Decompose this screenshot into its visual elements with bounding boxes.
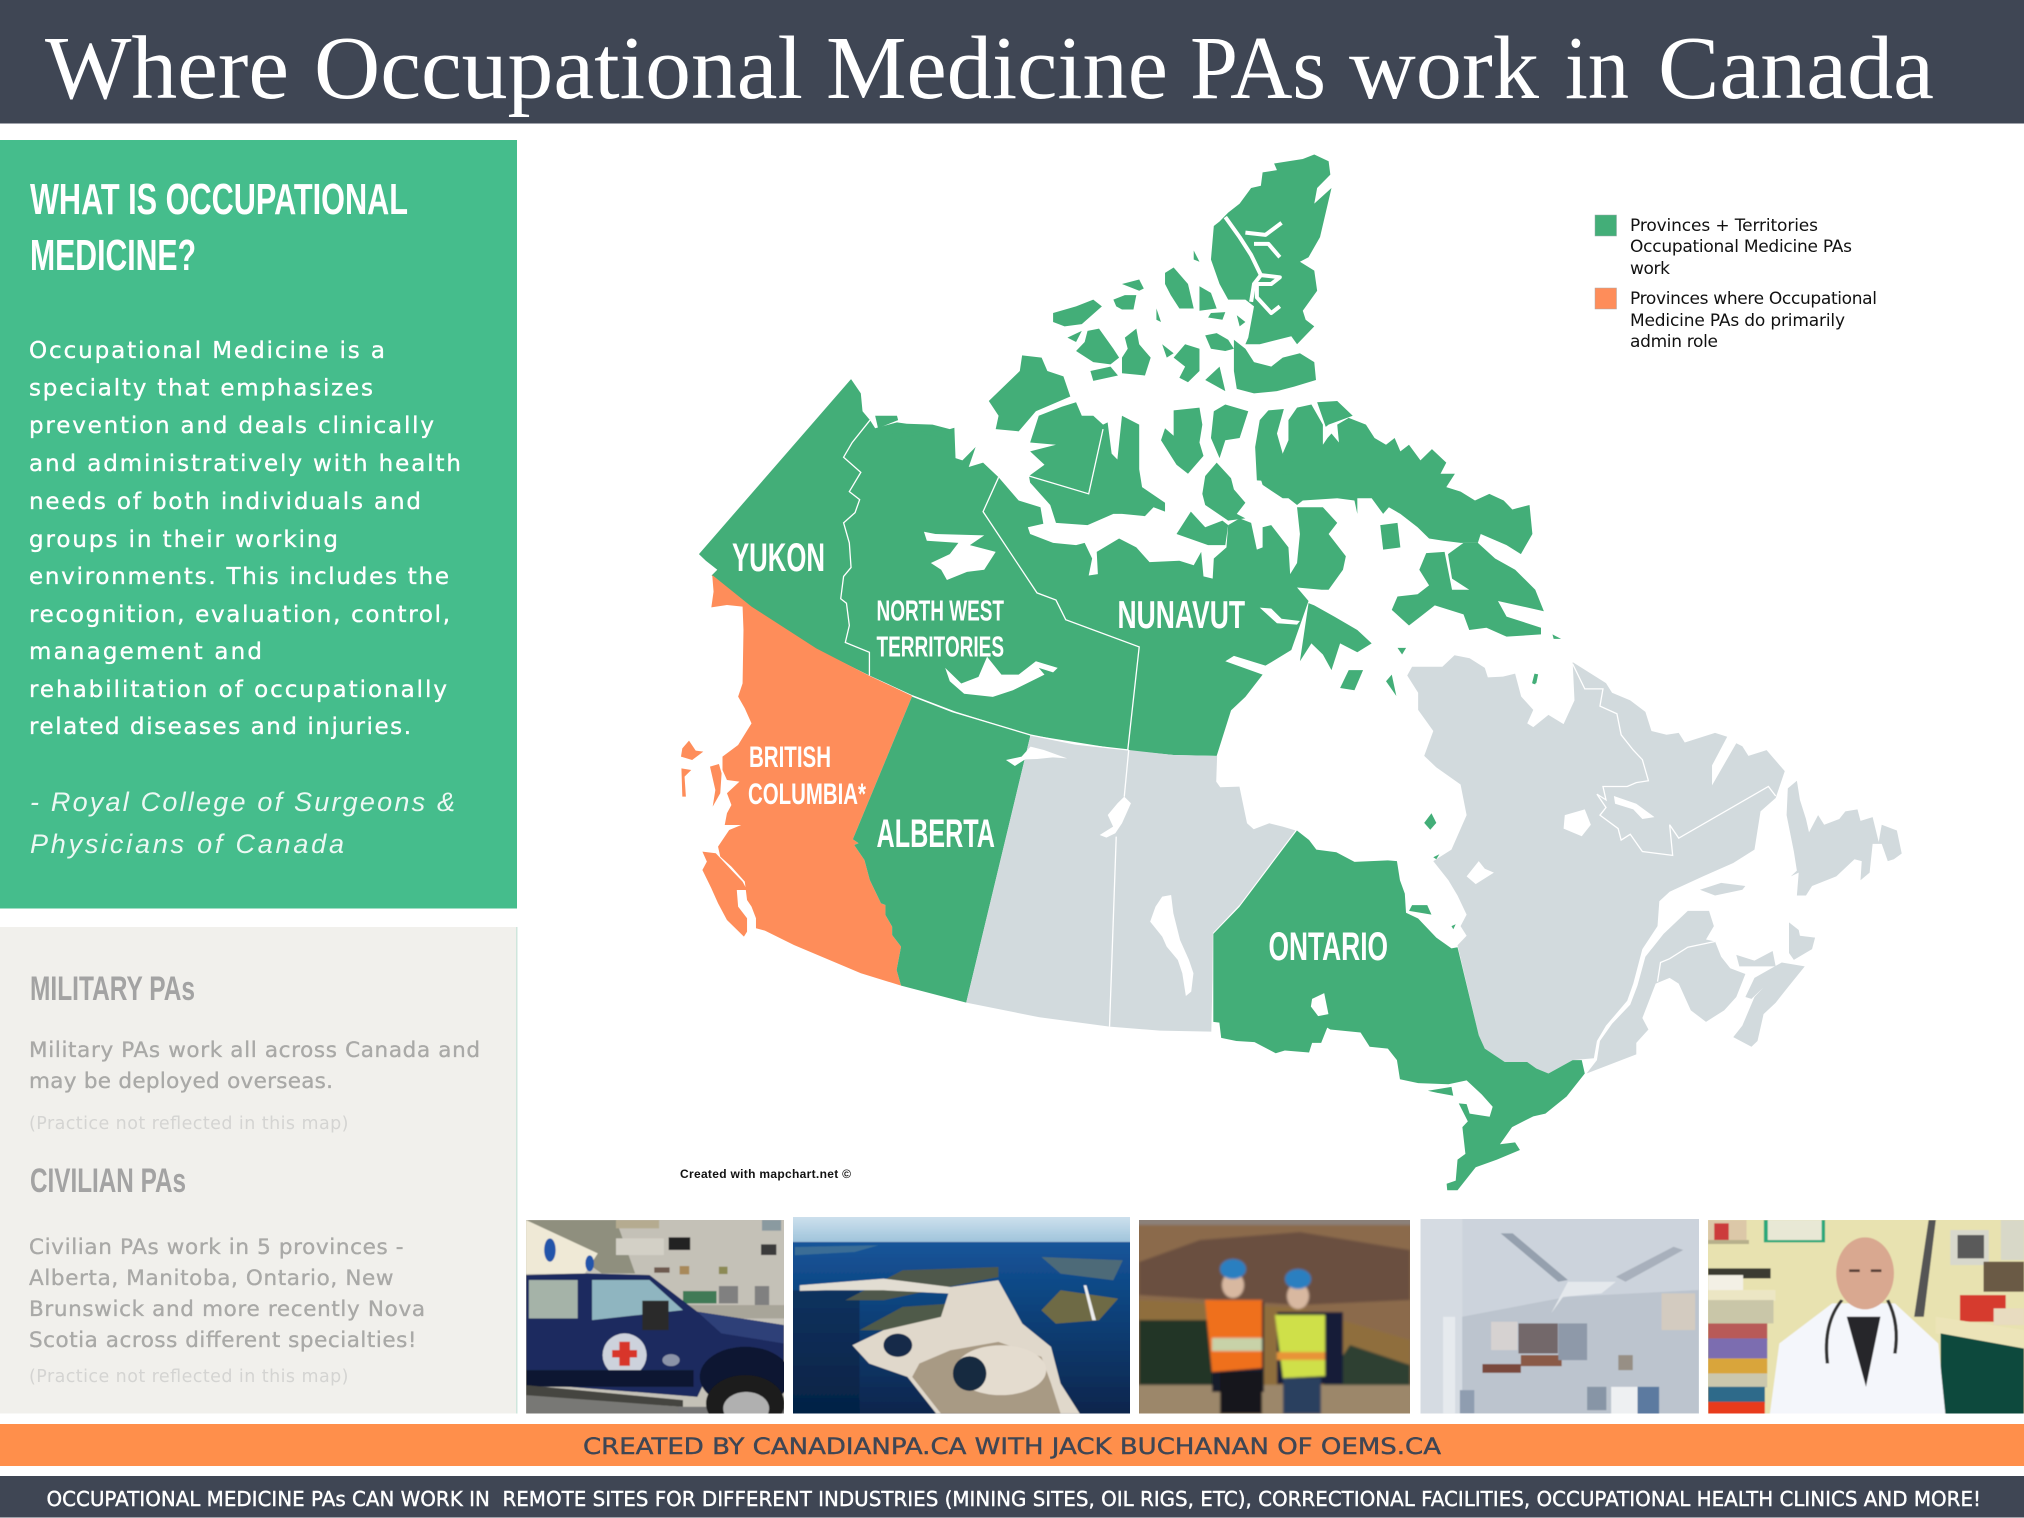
legend text: green: Occupational Medicine PAs [1630, 237, 1852, 257]
definition text: related diseases and injuries. [29, 714, 411, 740]
islands [1409, 674, 1538, 1096]
map labels: NUNAVUT [1118, 594, 1245, 637]
north: territories and arctic islands [699, 155, 1561, 756]
map labels: ONTARIO [1268, 925, 1388, 969]
text: civilian PAs: Civilian PAs work in 5 provinces - [29, 1235, 404, 1260]
region: Alberta [853, 696, 1031, 1003]
territory borders [841, 420, 870, 676]
Ellesmere channels [1225, 217, 1282, 313]
title: Medicine [826, 19, 1168, 118]
title [45, 19, 1934, 118]
definition text: management and [29, 639, 262, 665]
region: Ontario [1213, 830, 1585, 1190]
map labels: BRITISH [749, 741, 831, 774]
region: Saskatchewan and Manitoba [966, 735, 1296, 1032]
legend text: orange: Provinces where Occupational [1630, 289, 1877, 309]
title: Occupational [314, 19, 803, 118]
title banner [0, 0, 2024, 124]
definition text: groups in their working [29, 527, 338, 553]
legend text: green [1630, 216, 1852, 279]
map labels: NORTH WEST [876, 596, 1004, 628]
footer text: OCCUPATIONAL MEDICINE PAs CAN WORK IN REMOTE SITES FOR DIFFERENT INDUSTRIES (MINING SITES, OIL RIGS, ETC), CORRECTIONAL FACILITIES, OCCUPATIONAL HEALTH CLINICS AND MORE! [46, 1487, 1981, 1511]
text: civilian PAs [29, 1235, 425, 1353]
definition text: needs of both individuals and [29, 489, 421, 515]
definition text [29, 338, 461, 740]
legend swatch: orange [1595, 288, 1616, 309]
map labels [732, 536, 1388, 969]
lakes [1311, 796, 1654, 1016]
legend text: orange: Medicine PAs do primarily [1630, 311, 1845, 331]
photo: snowy remote site [1420, 1219, 1699, 1414]
map of Canada [680, 155, 1902, 1190]
text: civilian PAs: Brunswick and more recently Nova [29, 1297, 425, 1322]
panel heading: WHAT IS OCCUPATIONAL [30, 175, 408, 224]
east: Ontario, Quebec, Atlantic [1213, 655, 1902, 1190]
text: civilian PAs: Alberta, Manitoba, Ontario, New [29, 1266, 394, 1291]
lakes [924, 532, 1300, 697]
region: British Columbia [681, 575, 912, 986]
map labels: TERRITORIES [876, 632, 1004, 664]
title: PAs [1190, 19, 1326, 118]
title: Where [45, 19, 289, 118]
note: civilian: (Practice not reflected in this map) [29, 1367, 348, 1387]
attribution: Physicians of Canada [30, 829, 344, 859]
panel: what is occupational medicine [0, 140, 517, 908]
legend text: orange [1630, 289, 1877, 352]
definition text: rehabilitation of occupationally [29, 677, 447, 703]
legend text: orange: admin role [1630, 332, 1718, 352]
credit text: CREATED BY CANADIANPA.CA WITH JACK BUCHANAN OF OEMS.CA [583, 1435, 1441, 1460]
text: military PAs: Military PAs work all across Canada and [29, 1038, 480, 1063]
footer banner [0, 1476, 2024, 1518]
text: military PAs: may be deployed overseas. [29, 1069, 333, 1094]
legend [1595, 215, 1877, 352]
text: civilian PAs: Scotia across different specialties! [29, 1328, 416, 1353]
legend text: green: Provinces + Territories [1630, 216, 1818, 236]
definition text: specialty that emphasizes [29, 376, 373, 402]
title: Canada [1658, 19, 1934, 118]
photo: doctor in clinic [1708, 1220, 2024, 1414]
photo: ambulance truck [526, 1220, 784, 1414]
heading: civilian PAs: CIVILIAN PAs [30, 1162, 186, 1200]
arctic islands [875, 155, 1561, 696]
mainland Yukon, NWT, Nunavut [699, 379, 1346, 756]
definition text: Occupational Medicine is a [29, 338, 385, 364]
credit banner [0, 1424, 2024, 1466]
west: British Columbia, Alberta, prairies [681, 575, 1296, 1032]
panel heading: MEDICINE? [30, 231, 196, 280]
text: military PAs [29, 1038, 480, 1094]
title: in [1565, 19, 1629, 118]
attribution: - Royal College of Surgeons & [30, 787, 455, 817]
map labels: COLUMBIA* [748, 778, 866, 811]
definition text: recognition, evaluation, control, [29, 602, 450, 628]
region: Quebec and Labrador [1407, 655, 1785, 1073]
attribution [30, 787, 455, 859]
panel: military and civilian PAs [0, 927, 518, 1414]
panel heading [30, 175, 408, 280]
map credit: Created with mapchart.net © [680, 1167, 851, 1181]
definition text: prevention and deals clinically [29, 413, 434, 439]
map labels: ALBERTA [876, 812, 995, 856]
photo: two workers on mountain [1139, 1220, 1410, 1414]
photo: aerial view of mine [793, 1217, 1130, 1414]
heading: military PAs: MILITARY PAs [30, 970, 195, 1008]
lakes [1006, 747, 1193, 996]
border: Quebec and Labrador [1573, 664, 1776, 855]
legend swatch: green [1595, 215, 1616, 236]
note: military: (Practice not reflected in this map) [29, 1114, 348, 1134]
region: Maritimes [1587, 781, 1902, 1073]
definition text: environments. This includes the [29, 564, 449, 590]
title: work [1349, 19, 1539, 118]
map labels: YUKON [732, 536, 825, 580]
legend text: green: work [1630, 259, 1670, 279]
definition text: and administratively with health [29, 451, 461, 477]
